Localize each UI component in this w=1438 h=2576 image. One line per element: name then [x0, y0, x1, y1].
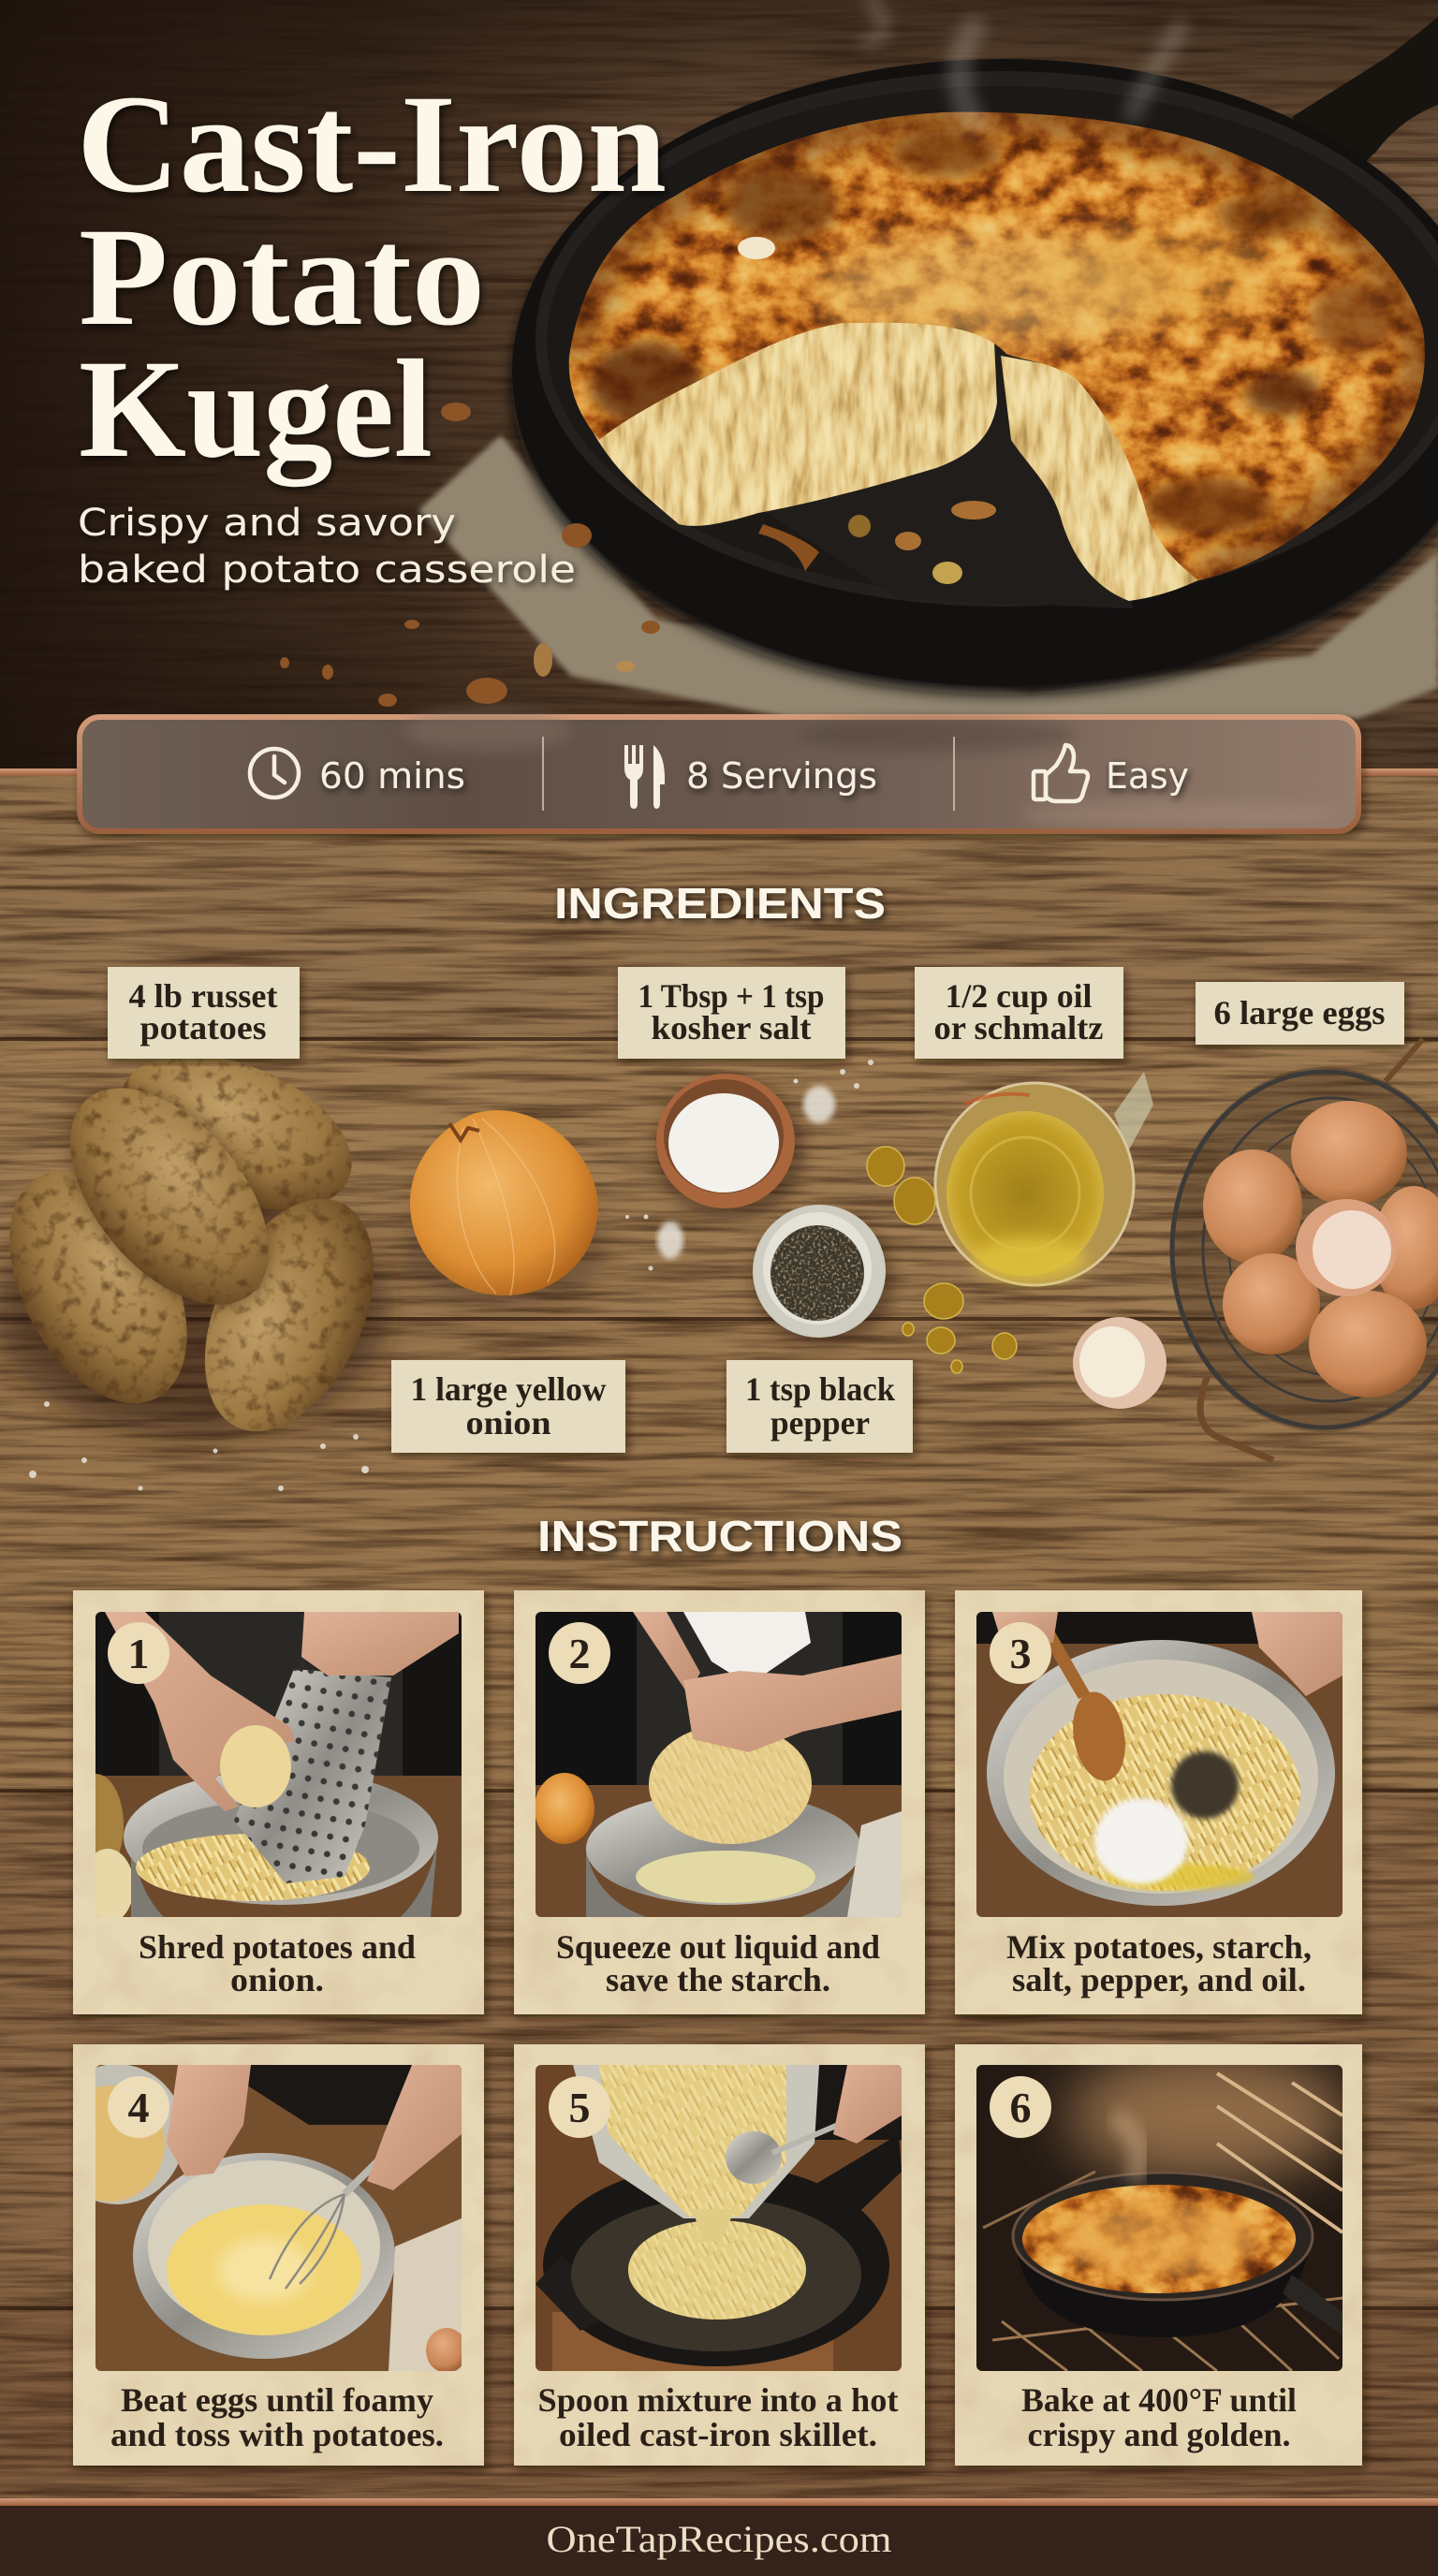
- oil droplets: [867, 1147, 1017, 1373]
- stats bar: [80, 710, 1358, 831]
- step 3 text: salt, pepper, and oil.: [1012, 1961, 1306, 1998]
- step 6 text: crispy and golden.: [1028, 2416, 1290, 2453]
- badge 1: 1: [127, 1630, 150, 1677]
- ingredient: potatoes: [0, 1025, 407, 1458]
- photo: mixing: [976, 1612, 1343, 1917]
- label: onion: onion: [466, 1404, 550, 1442]
- badge 5: 5: [569, 2084, 590, 2131]
- badge 6: [990, 2076, 1051, 2138]
- badge 4: 4: [127, 2084, 150, 2131]
- step card 6: [955, 2044, 1362, 2466]
- label: pepper: 1 tsp black: [745, 1370, 895, 1408]
- heading: ingredients: INGREDIENTS: [554, 879, 886, 928]
- label: oil: or schmaltz: [934, 1009, 1104, 1046]
- linen napkin: [418, 435, 1438, 719]
- title: [77, 66, 667, 487]
- step 2 text: save the starch.: [606, 1961, 830, 1998]
- step 4 text: [110, 2381, 444, 2453]
- badge 3: 3: [1009, 1630, 1032, 1677]
- subtitle: Crispy and savory: [78, 502, 456, 545]
- cast-iron skillet: [512, 17, 1438, 695]
- photo: spooning into skillet: [536, 2065, 902, 2371]
- label: pepper: pepper: [770, 1404, 870, 1442]
- ingredient: black pepper bowl: [753, 1205, 895, 1346]
- step 3 text: Mix potatoes, starch,: [1006, 1928, 1312, 1966]
- badge 5: [549, 2076, 610, 2138]
- step card 5: [514, 2044, 925, 2466]
- step card 1: [67, 1590, 484, 2014]
- label: oil: 1/2 cup oil: [946, 977, 1092, 1015]
- copper divider: [0, 768, 1438, 776]
- badge 4: [108, 2076, 169, 2138]
- label: salt: kosher salt: [652, 1009, 812, 1046]
- label: potatoes: potatoes: [140, 1009, 266, 1046]
- photo: squeezing: [535, 1612, 902, 1928]
- eggshell: [1073, 1317, 1167, 1409]
- icon: clock: [250, 749, 299, 798]
- badge 3: [990, 1622, 1051, 1684]
- step card 3: [955, 1590, 1362, 2014]
- subtitle: baked potato casserole: [78, 549, 576, 592]
- step 4 text: and toss with potatoes.: [110, 2416, 444, 2453]
- step 2 text: [556, 1928, 880, 1998]
- salt sprinkles: [29, 1060, 873, 1491]
- label: onion: [391, 1360, 625, 1453]
- step 1 text: Shred potatoes and: [139, 1928, 416, 1966]
- hero section: [0, 0, 1438, 772]
- label: onion: 1 large yellow: [410, 1370, 607, 1408]
- photo: oven baking: [976, 2050, 1348, 2371]
- badge 2: 2: [569, 1630, 590, 1677]
- footer website: OneTapRecipes.com: [547, 2518, 891, 2560]
- step 5 text: oiled cast-iron skillet.: [559, 2416, 877, 2453]
- step 5 text: Spoon mixture into a hot: [537, 2381, 899, 2419]
- badge 1: [108, 1622, 169, 1684]
- step 6 text: Bake at 400°F until: [1021, 2381, 1297, 2419]
- stat: servings: 8 Servings: [686, 755, 877, 797]
- label: pepper: [726, 1360, 913, 1453]
- badge 2: [549, 1622, 610, 1684]
- step card 2: [514, 1590, 925, 2014]
- step 2 text: Squeeze out liquid and: [556, 1928, 880, 1966]
- wire basket with eggs: [1170, 1039, 1438, 1460]
- label: eggs: 6 large eggs: [1213, 994, 1386, 1032]
- step 1 text: [139, 1928, 416, 1998]
- label: oil: [915, 967, 1123, 1059]
- steam: [866, 0, 1180, 122]
- title: Kugel: [79, 331, 433, 487]
- title: Potato: [79, 199, 485, 355]
- label: eggs: [1196, 982, 1404, 1045]
- badge 6: 6: [1009, 2084, 1032, 2131]
- icon: thumbs up: [1034, 745, 1088, 801]
- step 5 text: [537, 2381, 899, 2453]
- potato kugel: [552, 94, 1438, 608]
- step card 4: [50, 2044, 484, 2466]
- step 3 text: [1006, 1928, 1312, 1998]
- step 1 text: onion.: [230, 1961, 324, 1998]
- label: salt: 1 Tbsp + 1 tsp: [638, 977, 824, 1015]
- step 6 text: [1021, 2381, 1297, 2453]
- footer bar: [0, 2498, 1438, 2576]
- stat: difficulty: Easy: [1106, 755, 1189, 797]
- ingredient: onion: [403, 1110, 609, 1308]
- subtitle: [78, 502, 576, 592]
- label: potatoes: [108, 967, 300, 1059]
- step 4 text: Beat eggs until foamy: [121, 2381, 433, 2419]
- photo: beating eggs: [50, 2064, 467, 2373]
- photo: shredding: [95, 1612, 462, 1917]
- heading: instructions: INSTRUCTIONS: [537, 1512, 902, 1560]
- title: Cast-Iron: [77, 66, 667, 222]
- eggs: [1203, 1101, 1438, 1398]
- label: potatoes: 4 lb russet: [129, 977, 278, 1015]
- ingredient: kosher salt bowl: [655, 1074, 805, 1222]
- icon: fork and knife: [624, 745, 665, 809]
- ingredient: oil measuring cup: [935, 1072, 1153, 1285]
- crumbs: [280, 402, 660, 707]
- stat: time: 60 mins: [319, 755, 465, 797]
- label: salt: [618, 967, 845, 1059]
